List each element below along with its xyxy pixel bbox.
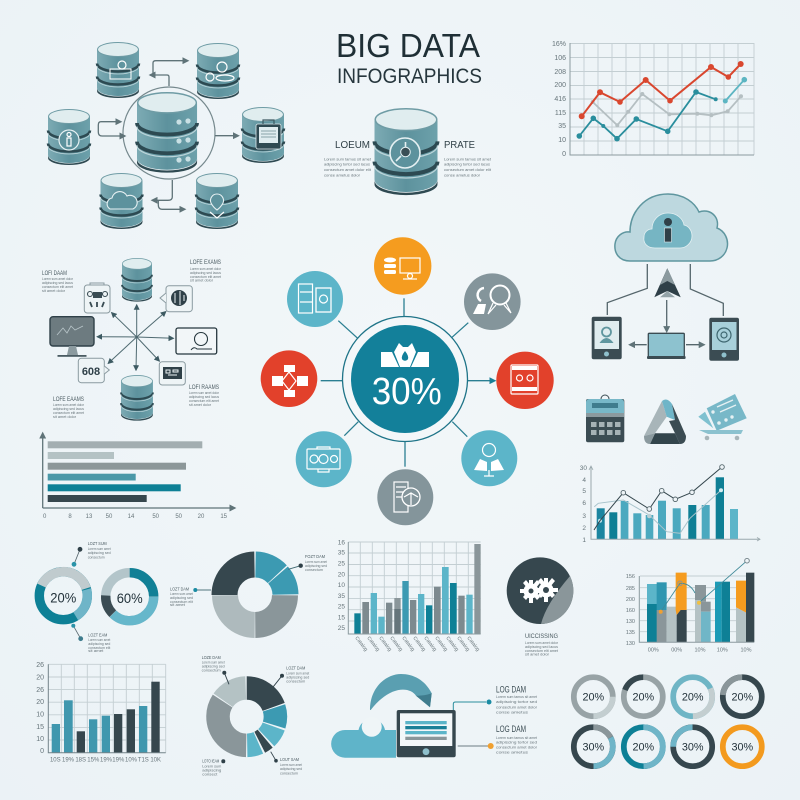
icon: card and board: [698, 394, 747, 440]
callout: bottom: sit amet: [88, 649, 104, 653]
chart: bars and lines right: 5: [582, 488, 586, 495]
callout: left: LOZT DAM: [170, 586, 189, 592]
panel: database network diagram: [48, 42, 284, 229]
icon: gears disc: [507, 557, 573, 624]
callout: top left: [202, 655, 229, 684]
callout: left: Lorem sum amet: [170, 592, 194, 596]
text block: bottom left label: sit amet dolor: [53, 415, 77, 419]
text block: bottom right label: adipiscing sed lacus: [189, 395, 219, 399]
chart: column chart with rotated labels: Catalog: [353, 636, 369, 653]
text block: right caption: PRATE: [444, 140, 475, 151]
chart: bars and lines right: 30: [580, 465, 587, 472]
panel: cloud network: [592, 194, 739, 361]
text block: bottom right label: sit amet dolor: [189, 403, 212, 407]
icon: speech square 608: [78, 358, 109, 383]
callout: bottom: LOG DAM: [496, 724, 526, 735]
chart: column chart with grid: 26: [36, 662, 44, 669]
ring 8: [723, 727, 762, 766]
line series: [659, 558, 749, 614]
icon: speech box right: [176, 328, 217, 354]
callout: bottom left: [202, 759, 225, 776]
text block: bottom right label: consectum elit amet: [189, 399, 220, 403]
ring 3: [667, 671, 719, 723]
text block: processing: UICCISSING: [525, 633, 558, 640]
callout: top: Lorem sum amet: [88, 547, 111, 551]
arrow: bottom connectors: [152, 180, 185, 209]
title: INFOGRAPHICS: [337, 65, 482, 88]
callout: top: LOZT SUM: [88, 541, 107, 546]
chart: stacked bars with line: 10%: [694, 648, 706, 654]
chart: line chart top right: 115: [555, 110, 566, 117]
icon: teal devices: [287, 271, 343, 327]
ring 7: 30%: [682, 742, 704, 754]
icon: top database: [122, 258, 152, 302]
callout: bottom left: Lorem sum: [202, 764, 221, 768]
text block: top right label: consectum elit amet: [190, 275, 222, 279]
text block: bottom right label: LOFI RAAMS: [189, 385, 219, 391]
chart: column chart with grid: 20: [36, 699, 44, 706]
text block: bottom right label: Lorem sum amet dolor: [189, 391, 220, 395]
chart: line chart top right: 0: [562, 151, 566, 158]
chart: column chart with rotated labels: 20: [338, 572, 345, 578]
text block: left caption: LOEUM: [335, 140, 370, 151]
callout: top right: adipiscing sed: [286, 676, 309, 680]
chart: horizontal bar chart: 50: [106, 514, 113, 520]
ring 4: 20%: [731, 692, 753, 704]
arrow: right connector: [215, 135, 238, 137]
icon: laptop: [647, 333, 686, 359]
text block: top left label: sit amet dolor: [42, 289, 66, 293]
icon: right phone: [709, 318, 739, 361]
chart: 20% donut: [31, 541, 111, 653]
text block: top right label: [190, 260, 222, 282]
chart: horizontal bar chart: 50: [175, 514, 183, 520]
text block: left caption: [324, 140, 372, 178]
chart: bars and lines right: 6: [582, 500, 586, 507]
chart: bars and lines right: 3: [582, 513, 586, 520]
text block: bottom left label: [53, 397, 85, 419]
callout: bottom right: adipiscing sed: [280, 767, 302, 771]
icon: database with cloud: [100, 174, 142, 229]
arrow: left connectors: [98, 122, 125, 136]
callout: top left: Lorem sum amet: [202, 660, 225, 664]
callout: bottom right: consectum: [280, 772, 298, 776]
chart: column chart with rotated labels: Catalog: [411, 636, 427, 653]
chart: line chart top right: [552, 41, 754, 158]
text block: left caption: consectum amet dolor elit: [324, 168, 372, 172]
chart: column chart with rotated labels: Catalog: [422, 636, 438, 653]
icon: cloud: [331, 717, 396, 758]
chart: stacked bars with line: 285: [626, 586, 635, 592]
ring 1: [574, 677, 613, 716]
panel: central database with captions: [324, 109, 492, 195]
chart: column chart with rotated labels: Catalog: [455, 636, 471, 653]
dark line series: [594, 465, 724, 530]
chart: stacked bars with line: 00%: [648, 648, 659, 654]
text block: right caption: conse ametus dolor: [444, 174, 481, 178]
title: BIG DATA: [336, 27, 480, 64]
callout: top: Lorem sum tamus sit amet: [496, 695, 538, 699]
ring 6: 20%: [632, 742, 654, 754]
callout: bottom left: LOTO IEAM: [202, 759, 219, 764]
chart: column chart with grid: 10%: [125, 758, 138, 764]
chart: column chart with rotated labels: 25: [338, 560, 345, 568]
chart: column chart with grid: 10: [36, 736, 44, 743]
icon: device square: [159, 362, 185, 385]
text block: left caption: conse ametus dolor: [324, 174, 361, 178]
chart: column chart with grid: 18S: [75, 758, 86, 764]
callout: bottom: adipiscing tortor sed: [496, 740, 537, 744]
chart: column chart with rotated labels: Catalog: [465, 636, 481, 653]
icon: clipboard square: [84, 283, 110, 313]
text block: top left label: consectum elit amet: [42, 285, 74, 289]
red series: [579, 61, 744, 119]
ring 2: 20%: [632, 692, 654, 704]
panel: radial arrow hub: [42, 258, 222, 421]
callout: right: [288, 554, 328, 572]
text block: right caption: consectum amet dolor elit: [444, 168, 492, 172]
chart: line chart top right: 10: [558, 137, 566, 144]
chart: stacked bars with line: 10%: [740, 648, 752, 654]
icon: bottom database: [121, 375, 153, 421]
callout: bottom: [71, 624, 111, 653]
ring 2: [618, 672, 668, 722]
text block: left caption: Lorem sum tamus sit amet: [324, 158, 372, 162]
icon: grey search: [464, 273, 521, 330]
text block: left caption: adipiscing tortor sed lacus: [324, 162, 370, 166]
ring 5: [567, 720, 620, 773]
callout: bottom right: [271, 752, 303, 776]
ring 4: [721, 676, 763, 718]
ring 7: [673, 727, 712, 766]
callout: bottom: adipiscing sed: [88, 642, 110, 646]
chart: column chart with rotated labels: Catalog: [377, 636, 393, 653]
icon: orange database monitor: [374, 237, 431, 295]
icon: triangle logo: [644, 400, 686, 444]
text block: bottom left label: adipiscing sed lacus: [53, 407, 84, 411]
chart: line chart top right: 200: [554, 82, 566, 89]
icon: cloud with info: [615, 194, 728, 261]
callout: top right: LOZT DAM: [286, 666, 306, 671]
callout: top: LOG DAM: [496, 684, 526, 695]
chart: column chart with rotated labels: 16: [338, 540, 345, 546]
chart: bars and lines right: 4: [582, 477, 586, 484]
panel: percentage rings: [567, 671, 763, 773]
callout: top: conse ametus: [496, 710, 528, 714]
text block: bottom left label: Lorem sum amet dolor: [53, 403, 85, 407]
callout: top: adipiscing tortor sed: [496, 700, 537, 704]
value: 30%: 30%: [372, 371, 442, 413]
chart: column chart with rotated labels: Catalog: [388, 636, 404, 653]
callout: top left: LOZE DAM: [202, 655, 221, 660]
chart: column chart with grid: 19%: [62, 758, 75, 764]
panel: central 30% hub: [261, 237, 554, 525]
icon: upward arrow: [654, 268, 681, 297]
callout: left: adipiscing sed: [170, 596, 193, 600]
text block: processing: [525, 633, 559, 656]
chart: line chart top right: 106: [554, 55, 566, 62]
chart: segmented donut: [202, 655, 310, 776]
icon: database with people: [197, 44, 239, 99]
chart: column chart with rotated labels: 15: [338, 614, 345, 622]
callout: left: sit amet: [170, 603, 186, 607]
icon: money: [381, 343, 429, 367]
text block: top left label: [42, 271, 74, 293]
text block: right caption: Lorem sum tamus sit amet: [444, 158, 492, 162]
callout: top left: adipiscing sed: [202, 664, 225, 668]
chart: column chart with rotated labels: 10: [338, 582, 345, 589]
chart: column chart with rotated labels: 25: [338, 625, 345, 632]
text block: top right label: adipiscing sed lacus: [190, 271, 221, 275]
text block: bottom left label: LOFE EAAMS: [53, 397, 84, 403]
text block: top left label: Lorem sum amet dolor: [42, 277, 74, 281]
icon: database with info sign: [48, 110, 90, 165]
icon: speech square 608: 608: [82, 366, 100, 378]
text block: top right label: sit amet dolor: [190, 278, 214, 282]
chart: stacked bars with line: [626, 558, 754, 654]
callout: bottom left: adipiscing: [202, 768, 221, 772]
callout: bottom right: Lorem sum amet: [280, 763, 303, 767]
chart: column chart with grid: 15%: [87, 758, 100, 764]
chart: column chart with grid: 15: [36, 724, 44, 731]
chart: horizontal bar chart: [43, 433, 235, 520]
chart: bars and lines right: 1: [582, 537, 586, 544]
chart: column chart with rotated labels: Catalog: [365, 636, 381, 653]
callout: bottom right: LOUT SAM: [280, 757, 299, 762]
chart: horizontal bar chart: 20: [198, 514, 205, 520]
callout: bottom: LOZT EAM: [88, 633, 108, 638]
text block: bottom right label: [189, 385, 220, 407]
icon: database with location pin: [196, 174, 238, 229]
chart: line chart top right: 35: [558, 123, 566, 130]
callout: bottom: Lorem sum amet: [88, 638, 111, 642]
chart: horizontal bar chart: 13: [86, 514, 93, 520]
teal series: [576, 77, 747, 142]
callout: bottom: consectum amet dolor: [496, 746, 538, 750]
icon: monitor: [50, 317, 94, 357]
chart: column chart with grid: 20: [36, 674, 44, 682]
icon: grey document globe: [377, 469, 433, 525]
callout: top: consectum: [88, 556, 105, 560]
icon: monitor: [397, 710, 456, 757]
text block: processing: sit amet dolor: [525, 652, 550, 656]
chart: bars and lines right: 2: [582, 525, 586, 532]
chart: line chart top right: 416: [554, 96, 566, 103]
light line series: [594, 488, 723, 533]
chart: column chart with grid: 26: [36, 687, 44, 694]
ring 8: 30%: [731, 742, 753, 754]
chart: horizontal bar chart: 8: [68, 514, 72, 520]
chart: 60% donut: 60%: [117, 590, 143, 606]
text block: processing: consectum elit amet: [525, 649, 559, 653]
callout: top left: consectum: [202, 668, 221, 672]
text block: top right label: LOFE EXAMS: [190, 260, 221, 266]
chart: line chart top right: 16%: [552, 41, 566, 48]
chart: column chart with grid: 0: [40, 748, 44, 755]
icon: teal person: [461, 430, 517, 486]
callout: top: [453, 684, 538, 714]
callout: right: Lorem sum amet: [305, 560, 328, 564]
chart: column chart with grid: 19%: [100, 758, 113, 764]
text block: bottom left label: consectum elit amet: [53, 411, 85, 415]
connector lines: [607, 264, 723, 345]
callout: bottom: consectum elit: [88, 646, 111, 650]
chart: column chart with grid: 10K: [150, 758, 161, 764]
text block: processing: Lorem sum amet dolor: [525, 641, 559, 645]
text block: right caption: adipiscing tortor sed lacus: [444, 162, 490, 166]
chart: bars and lines right: [580, 465, 760, 544]
chart: 60% donut: [96, 563, 164, 631]
icon: database with book and gear: [97, 42, 139, 98]
ring 1: 20%: [582, 692, 604, 704]
ring 6: [624, 727, 663, 766]
callout: bottom: Lorem sum tamus sit amet: [496, 736, 538, 740]
chart: stacked bars with line: 130: [626, 619, 635, 625]
panel: cloud to monitor: [331, 674, 538, 758]
callout: top right: Lorem sum amet: [286, 672, 310, 676]
chart: stacked bars with line: 10%: [717, 648, 728, 654]
chart: stacked bars with line: 156: [626, 574, 635, 580]
chart: 20% donut: 20%: [50, 590, 76, 606]
connector lines: [321, 298, 495, 467]
panel: processing gears: [507, 557, 573, 656]
icon: teal device: [296, 431, 352, 487]
chart: column chart with rotated labels: Catalog: [444, 636, 460, 653]
chart: column chart with rotated labels: 25: [338, 604, 345, 610]
icon: database with tablet: [242, 108, 284, 163]
chart: column chart with rotated labels: [338, 540, 481, 653]
callout: right: adipiscing sed: [305, 564, 327, 568]
chart: horizontal bar chart: 14: [128, 514, 135, 520]
callout: right: consectum: [305, 568, 323, 572]
callout: bottom: conse ametus: [496, 750, 528, 754]
chart: horizontal bar chart: 50: [152, 514, 160, 520]
chart: column chart with rotated labels: Catalog: [400, 636, 416, 653]
callout: top right: [273, 666, 310, 687]
callout: top: [72, 541, 111, 567]
chart: stacked bars with line: 160: [626, 608, 635, 614]
icon: speech square top right: [160, 286, 192, 312]
chart: stacked bars with line: 130: [626, 641, 635, 647]
chart: column chart with grid: 10S: [50, 758, 61, 764]
central disc: [342, 316, 468, 442]
chart: column chart with rotated labels: 35: [338, 593, 345, 600]
text block: processing: adipiscing sed lacus: [525, 645, 558, 649]
title: [336, 27, 482, 88]
arrow: hub spokes: [97, 305, 173, 370]
chart: stacked bars with line: 00%: [671, 648, 682, 654]
icon: magnifier database: [374, 109, 438, 195]
chart: stacked bars with line: 200: [626, 597, 635, 603]
callout: bottom left: consect: [202, 772, 218, 776]
text block: top left label: adipiscing sed lacus: [42, 281, 73, 285]
icon: left phone: [592, 317, 622, 359]
ring 3: 20%: [682, 692, 704, 704]
icon: red network: [261, 350, 317, 407]
chart: column chart with rotated labels: 35: [338, 550, 345, 556]
text block: right caption: [444, 140, 492, 178]
chart: line chart top right: 208: [554, 69, 566, 76]
chart: horizontal bar chart: 0: [43, 514, 47, 520]
arrow: curved arrow: [370, 674, 432, 710]
icon: calendar: [586, 395, 624, 442]
chart: quarter donut: [170, 552, 328, 638]
grey series: [591, 92, 743, 127]
chart: column chart with grid: [36, 662, 166, 764]
chart: column chart with grid: 19%: [112, 758, 125, 764]
callout: top right: consectum: [286, 680, 305, 684]
callout: left: [170, 586, 211, 607]
chart: column chart with grid: 10: [36, 712, 44, 718]
ring 5: 30%: [582, 742, 604, 754]
callout: top: consectum amet dolor: [496, 706, 538, 710]
icon: central database ring: [123, 87, 215, 179]
callout: left: consectum elit: [170, 600, 194, 604]
callout: right: FOZT DAM: [305, 554, 325, 559]
icon: red screen: [496, 352, 554, 409]
chart: horizontal bar chart: 15: [220, 514, 228, 520]
chart: stacked bars with line: 135: [626, 630, 635, 636]
chart: column chart with grid: T1S: [138, 758, 149, 764]
chart: column chart with rotated labels: Catalog: [433, 636, 449, 653]
text block: top left label: LOFI DAAM: [42, 271, 67, 277]
callout: bottom: [458, 724, 538, 754]
arrow: top connectors: [150, 61, 188, 86]
callout: top: adipiscing sed: [88, 551, 111, 555]
text block: top right label: Lorem sum amet dolor: [190, 267, 222, 271]
